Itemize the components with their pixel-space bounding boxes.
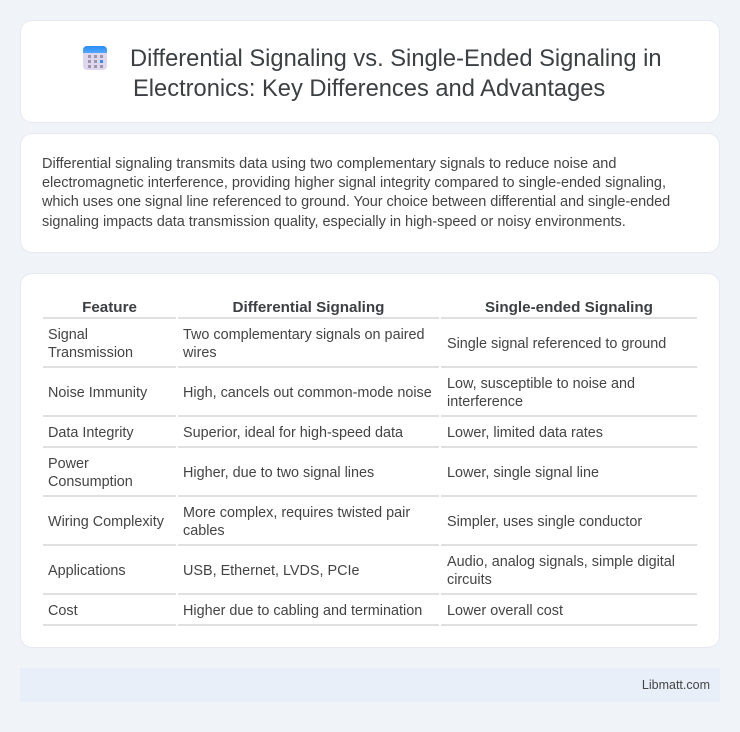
row: Power Consumption: Power — [48, 456, 89, 472]
table header: Single-ended Signaling — [485, 299, 653, 316]
title: Electronics: Key Differences and Advantages — [133, 76, 605, 102]
row: Applications: Audio, analog signals, simple digital — [447, 554, 675, 570]
row: Power Consumption: Lower, single signal line — [447, 465, 599, 481]
row: Data Integrity: Data Integrity — [48, 425, 134, 441]
row: Noise Immunity: Low, susceptible to noise and — [447, 376, 635, 392]
panel: introduction — [20, 133, 720, 253]
row: Cost: Higher due to cabling and termination — [183, 603, 422, 619]
footer text: Libmatt.com — [642, 678, 710, 692]
row: Cost: Lower overall cost — [447, 603, 563, 619]
row: Wiring Complexity: cables — [183, 523, 225, 539]
row: Data Integrity — [48, 425, 603, 441]
row: Signal Transmission: wires — [183, 345, 217, 361]
text block: introduction: electromagnetic interference, providing higher signal integrity compared to single-ended signaling, — [42, 175, 666, 191]
text block: introduction: Differential signaling transmits data using two complementary signals to reduce noise and — [42, 156, 616, 172]
icon: calendar — [83, 46, 107, 70]
panel: title card — [20, 20, 720, 123]
row: Data Integrity: Superior, ideal for high-speed data — [183, 425, 403, 441]
row: Signal Transmission: Signal — [48, 327, 88, 343]
row: Signal Transmission: Two complementary signals on paired — [183, 327, 425, 343]
text block: introduction: which uses one signal line referenced to ground. Your choice between differential and single-ended — [42, 194, 670, 210]
table header — [82, 299, 653, 316]
row: Power Consumption — [48, 456, 599, 490]
row: Applications: USB, Ethernet, LVDS, PCIe — [183, 563, 360, 579]
row: Noise Immunity — [48, 376, 635, 410]
row: Signal Transmission: Transmission — [48, 345, 133, 361]
row: Cost: Cost — [48, 603, 78, 619]
row: Wiring Complexity: More complex, requires twisted pair — [183, 505, 410, 521]
row: Signal Transmission: Single signal referenced to ground — [447, 336, 666, 352]
row: Wiring Complexity: Wiring Complexity — [48, 514, 164, 530]
title — [130, 46, 662, 102]
row: Wiring Complexity — [48, 505, 642, 539]
row: Data Integrity: Lower, limited data rates — [447, 425, 603, 441]
row: Noise Immunity: Noise Immunity — [48, 385, 147, 401]
row: Power Consumption: Higher, due to two signal lines — [183, 465, 374, 481]
row: Signal Transmission — [48, 327, 666, 361]
table header: Differential Signaling — [233, 299, 384, 316]
panel: comparison table — [20, 273, 720, 648]
footer bar — [20, 668, 720, 702]
row: Wiring Complexity: Simpler, uses single conductor — [447, 514, 642, 530]
row: Noise Immunity: High, cancels out common-mode noise — [183, 385, 432, 401]
text block: introduction: signaling impacts data transmission quality, especially in high-speed or noisy environments. — [42, 214, 626, 230]
table header: Feature — [82, 299, 137, 316]
row: Applications: Applications — [48, 563, 126, 579]
row: Cost — [48, 603, 563, 619]
row: Applications: circuits — [447, 572, 492, 588]
row: Applications — [48, 554, 675, 588]
text block: introduction — [42, 156, 670, 230]
row: Power Consumption: Consumption — [48, 474, 133, 490]
row: Noise Immunity: interference — [447, 394, 523, 410]
title: Differential Signaling vs. Single-Ended Signaling in — [130, 46, 662, 72]
